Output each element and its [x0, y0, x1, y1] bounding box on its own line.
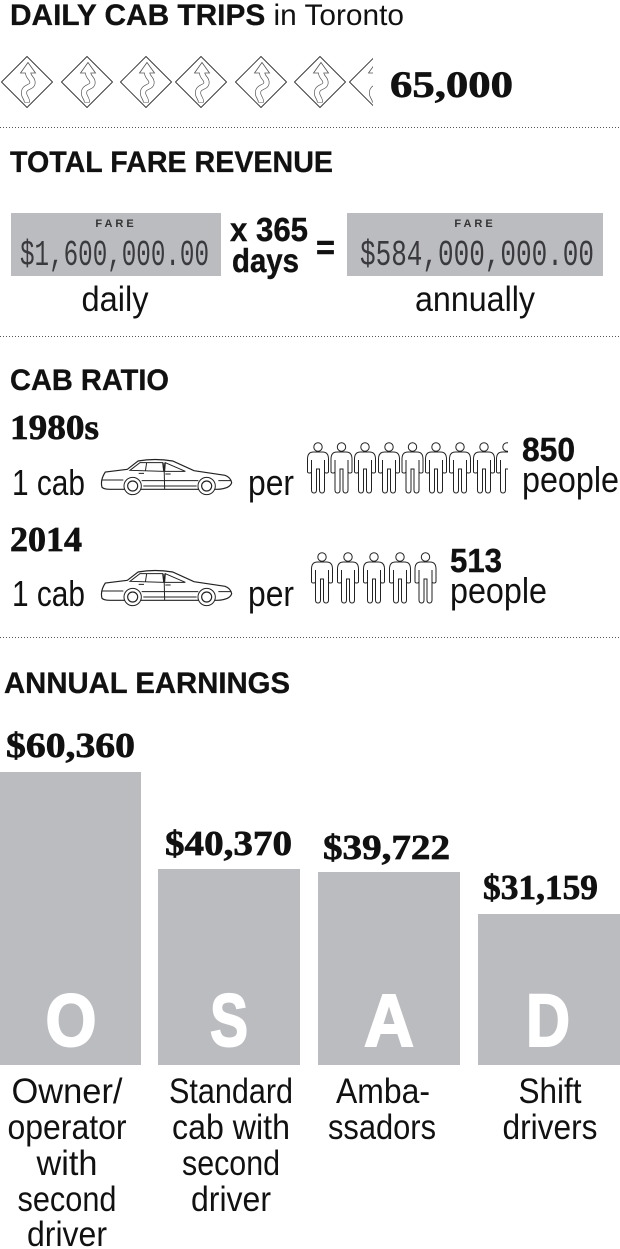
heading: cab ratio: CAB RATIO [10, 364, 169, 397]
label: owner/operator with second driver: second [18, 1180, 116, 1219]
bar: owner/operator: O [46, 979, 96, 1062]
bar: ambassadors: $39,722 [323, 828, 450, 867]
label: owner/operator with second driver [8, 1072, 127, 1249]
icons: people row [312, 553, 436, 603]
icon: car [101, 459, 232, 495]
number: daily trips: 65,000 [390, 65, 513, 106]
multiplier: x 365 days: x 365 [230, 211, 308, 248]
label: standard cab with second driver [169, 1072, 293, 1219]
number: 850 people: 850 [522, 431, 575, 468]
panel: daily fare meter [11, 213, 221, 276]
row: 2014 ratio [10, 520, 547, 614]
bar: standard cab: $40,370 [165, 824, 292, 863]
multiplier: x 365 days [230, 211, 308, 279]
bar: ambassadors: A [364, 979, 414, 1062]
label: shift drivers: drivers [502, 1108, 598, 1147]
label: owner/operator with second driver: operator [8, 1108, 127, 1147]
icon row: winding road signs [2, 56, 400, 108]
label: ambassadors [328, 1072, 436, 1147]
bar: owner/operator: $60,360 [6, 726, 135, 765]
label: shift drivers: Shift [518, 1072, 582, 1111]
label: standard cab with second driver: driver [191, 1180, 271, 1219]
number: 513 people: people [450, 570, 547, 611]
label: per: per [248, 462, 294, 503]
label: ambassadors: ssadors [328, 1108, 436, 1147]
bar chart: annual earnings [0, 726, 620, 1065]
number: 513 people: 513 [450, 542, 502, 579]
label: 1 cab: 1 cab [12, 573, 85, 614]
panel: daily fare meter: FARE [95, 218, 137, 230]
label: per: per [248, 573, 294, 614]
bar: shift drivers: D [526, 979, 570, 1062]
label: shift drivers [502, 1072, 598, 1147]
panel: annual fare meter: FARE [454, 218, 496, 230]
label: standard cab with second driver: second [182, 1144, 280, 1183]
label: daily: daily [82, 280, 149, 319]
panel: annual fare meter [347, 213, 603, 276]
label: standard cab with second driver: Standard [169, 1072, 293, 1111]
label: 1 cab: 1 cab [12, 462, 85, 503]
bar: shift drivers [478, 868, 620, 1065]
label: owner/operator with second driver: with [36, 1144, 98, 1183]
bar: standard cab [158, 824, 300, 1065]
bar: owner/operator [0, 726, 141, 1065]
label: annually: annually [415, 280, 535, 319]
number: 850 people [522, 431, 619, 500]
icon: car [101, 570, 232, 606]
label: ambassadors: Amba- [336, 1072, 430, 1111]
equals sign: = [316, 229, 335, 267]
multiplier: x 365 days: days [232, 242, 299, 279]
label: standard cab with second driver: cab with [172, 1108, 290, 1147]
bar: shift drivers: $31,159 [483, 868, 598, 907]
bar: ambassadors [318, 828, 460, 1065]
label: owner/operator with second driver: Owner/ [12, 1072, 123, 1111]
year 2014: 2014 [10, 520, 82, 559]
icons: people row [308, 443, 518, 493]
bar: standard cab: S [210, 979, 248, 1062]
number: 513 people [450, 542, 547, 611]
year 1980s: 1980s [10, 408, 99, 447]
heading: annual earnings: ANNUAL EARNINGS [4, 667, 290, 700]
panel: daily fare meter: $1,600,000.00 [20, 235, 209, 276]
heading: total fare revenue: TOTAL FARE REVENUE [10, 146, 333, 179]
row: 1980s ratio [10, 408, 619, 503]
